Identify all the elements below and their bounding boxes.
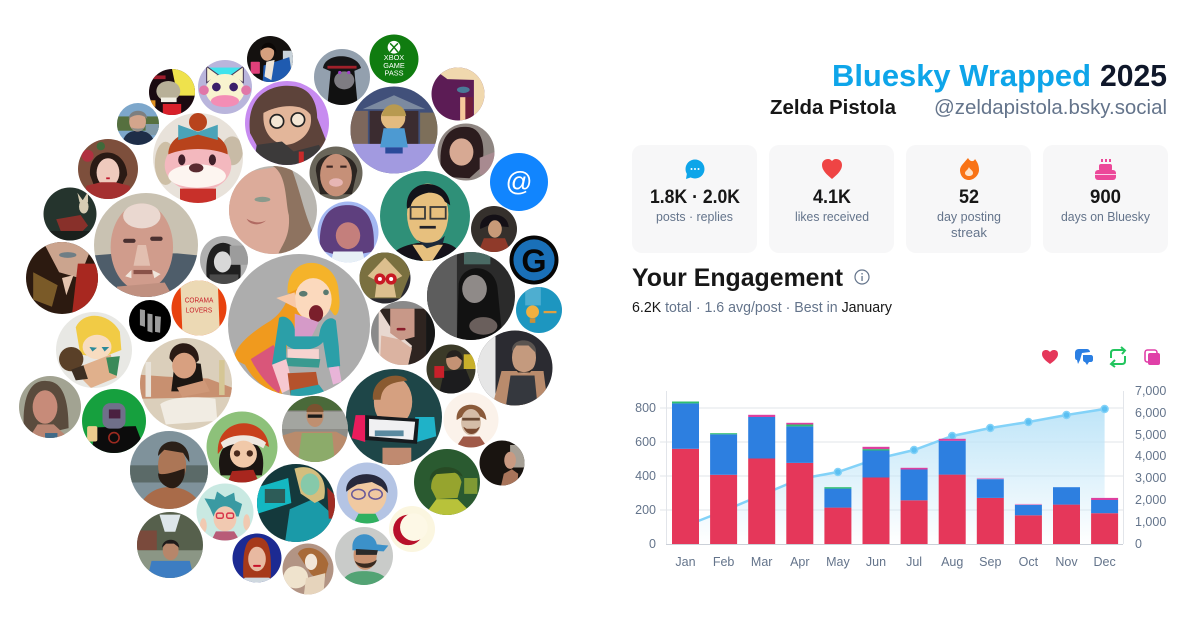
month labels: Oct: [1019, 555, 1039, 569]
avatar: woman lying on bed: [140, 338, 232, 430]
icon: flame: [960, 158, 979, 180]
left axis labels: 200: [635, 503, 656, 517]
avatar: bearded man at sunset: [130, 431, 208, 509]
avatar: Mii with glasses: [336, 462, 398, 524]
avatar: Xbox Game Pass: GAME: [383, 61, 405, 70]
avatar: yellow robot illustration: [149, 69, 195, 115]
avatar: bald man selfie: [94, 193, 198, 297]
avatar: Corama Lovers: LOVERS: [186, 305, 212, 314]
user name and handle: @zeldapistola.bsky.social: [934, 97, 1167, 119]
right axis labels: 5,000: [1135, 428, 1166, 442]
heading: your engagement: Your Engagement: [632, 264, 844, 292]
avatar: red crescent moon: [389, 506, 435, 552]
icon: info: [855, 270, 869, 284]
panel: days on Bluesky: days on Bluesky: [1061, 210, 1151, 224]
month labels: Jun: [866, 555, 886, 569]
avatar: black W logo: [129, 300, 171, 342]
chart: monthly engagement stacked bars with cumulative line: [635, 384, 1166, 569]
month labels: Aug: [941, 555, 963, 569]
panel: days on Bluesky: [1043, 145, 1168, 253]
icon: legend quotes: [1145, 350, 1160, 365]
icon: speech bubble: [686, 160, 704, 179]
avatar: sultry brunette in frame: [371, 301, 435, 365]
cumulative area: [686, 409, 1105, 544]
cumulative line: [686, 406, 1108, 526]
avatar cluster: [19, 34, 562, 594]
avatar: Xbox Game Pass: [370, 34, 418, 84]
avatar: man by a lake: [117, 103, 159, 145]
avatar: man holding Nintendo Switch: [346, 369, 442, 465]
avatar: woman with long grey hair: [19, 376, 81, 438]
avatar: black and white portrait: [200, 236, 248, 284]
right axis labels: 2,000: [1135, 493, 1166, 507]
avatar: woman with curly hair: [480, 440, 524, 486]
left axis labels: 400: [635, 469, 656, 483]
month labels: Jul: [906, 555, 922, 569]
avatar: man in green tank top: [282, 396, 348, 462]
panel: posts and replies: posts · replies: [656, 210, 733, 224]
left axis labels: 800: [635, 401, 656, 415]
grid lines: [660, 391, 1124, 544]
avatar: woman with dark curls: [438, 124, 494, 180]
right axis labels: 0: [1135, 537, 1142, 551]
avatar: man drinking from red cup: [426, 344, 476, 394]
month labels: May: [826, 555, 850, 569]
avatar: woman selfie close up: [229, 166, 317, 254]
right axis labels: 7,000: [1135, 384, 1166, 398]
legend icons: [1042, 347, 1160, 367]
panel: day posting streak: 52: [959, 187, 979, 208]
month labels: Jan: [675, 555, 696, 569]
right axis labels: 3,000: [1135, 471, 1166, 485]
avatar: blue at-sign default: @: [505, 167, 533, 197]
month labels: Apr: [790, 555, 810, 569]
avatar: close up of an eye: [432, 68, 484, 120]
avatar: woman sticking tongue out: [310, 146, 362, 200]
panel: posts and replies: 1.8K · 2.0K: [650, 187, 740, 208]
title: Bluesky Wrapped: [832, 58, 1091, 93]
avatar: teal haired cartoon man: [196, 484, 254, 540]
avatar: green duotone man: [414, 449, 480, 515]
avatar: blonde warrior illustration: [56, 312, 132, 388]
avatar: Splatoon squid: [360, 252, 410, 304]
panel: day posting streak: streak: [951, 226, 988, 240]
avatar: purple haired girl: [318, 202, 378, 262]
avatar: blue G logo: [510, 236, 558, 284]
title: 2025: [1100, 58, 1167, 93]
avatar: Zelda illustration, profile owner: [228, 254, 370, 396]
month labels: Mar: [751, 555, 772, 569]
right axis labels: [1135, 384, 1166, 551]
left axis labels: [635, 401, 656, 551]
avatar: Xbox Game Pass: XBOX: [384, 53, 404, 62]
avatar: masked knight in red: [44, 188, 96, 240]
month labels: Dec: [1093, 555, 1116, 569]
panel: likes received: likes received: [795, 210, 869, 224]
avatar: Corama Lovers: [172, 280, 226, 336]
avatar: pink toy mascot: [153, 113, 243, 203]
icon: legend replies: [1075, 349, 1093, 365]
avatar: woman in blue robe: [247, 36, 293, 82]
avatar: Xbox Game Pass: PASS: [384, 69, 404, 78]
user name and handle: [770, 97, 1167, 119]
avatar: horse and rider illustration: [282, 544, 334, 594]
right axis labels: 1,000: [1135, 515, 1166, 529]
bars: reposts: [672, 402, 890, 489]
engagement summary: 6.2K total · 1.6 avg/post · Best in January: [632, 300, 893, 316]
avatar: anime woman with glasses: [245, 81, 329, 165]
avatar: woman in floral headdress: [78, 139, 138, 199]
icon: legend likes heart: [1042, 350, 1058, 364]
avatar: lightbulb and birdcage: [516, 287, 562, 333]
panel: days on Bluesky: 900: [1090, 187, 1121, 208]
month labels: Nov: [1055, 555, 1078, 569]
avatar: Corama Lovers: CORAMA: [185, 296, 214, 305]
panel: likes received: 4.1K: [813, 187, 851, 208]
avatar: blue G logo: G: [521, 243, 547, 279]
left axis labels: 600: [635, 435, 656, 449]
avatar: man in dark tank top: [478, 330, 552, 406]
month labels: [675, 555, 1116, 569]
icon: legend reposts: [1111, 347, 1125, 367]
avatar: Samus illustration: [257, 464, 335, 542]
icon: heart: [822, 159, 842, 179]
bars: replies: [672, 403, 1118, 515]
month labels: Feb: [713, 555, 734, 569]
avatar: girl in santa hat: [206, 412, 278, 482]
avatar: cartoon man with glasses: [380, 171, 470, 261]
bars: likes: [672, 449, 1118, 544]
month labels: Sep: [979, 555, 1001, 569]
avatar: pixel cat with headphones: [198, 60, 252, 114]
avatar: dark moody portrait: [427, 252, 515, 340]
bars: quotes: [748, 415, 1118, 505]
avatar: sketched man with glasses: [444, 392, 498, 448]
avatar: veiled eyes illustration: [26, 242, 98, 314]
avatar: man in blue cap: [335, 527, 393, 585]
avatar: blue at-sign default: [490, 153, 548, 211]
avatar: man in blue shirt under lights: [137, 512, 203, 578]
user name and handle: Zelda Pistola: [770, 97, 897, 119]
panel: day posting streak: [906, 145, 1031, 253]
icon: birthday cake: [1095, 159, 1116, 180]
panel: posts and replies: [632, 145, 757, 253]
right axis labels: 6,000: [1135, 406, 1166, 420]
avatar: Animal Crossing villager: [350, 86, 438, 174]
avatar: gas mask figure in cap: [314, 49, 370, 105]
avatar: dark anime character: [471, 206, 517, 252]
panel: likes received: [769, 145, 894, 253]
right axis labels: 4,000: [1135, 449, 1166, 463]
panel: day posting streak: day posting: [937, 210, 1001, 224]
avatar: red haired woman: [232, 534, 282, 582]
avatar: pixel robot thumbs up: [82, 389, 146, 453]
left axis labels: 0: [649, 537, 656, 551]
